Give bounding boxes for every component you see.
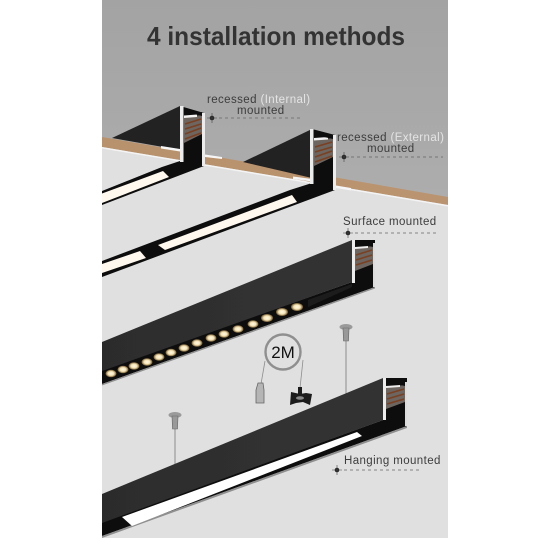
recessed internal lit strip [102, 171, 169, 203]
2M label: 2M [271, 343, 295, 362]
recessed external lit strip: short [102, 251, 146, 273]
hanging lit strip [122, 432, 362, 526]
wood ceiling edge [102, 137, 448, 206]
hanging wire left [174, 428, 176, 466]
label: recessed external: mounted [367, 143, 415, 155]
wall background [102, 0, 448, 538]
ceiling background [102, 0, 448, 198]
label: hanging mounted [332, 455, 441, 475]
icon: black bracket [290, 387, 312, 405]
label: surface mounted: Surface mounted [343, 216, 437, 228]
recessed external profile end [310, 129, 336, 190]
recessed external light track [102, 129, 351, 277]
hanging wire right [345, 340, 347, 396]
surface mounted light [102, 240, 375, 386]
hanging profile end [383, 378, 407, 426]
icon: ceiling anchor left [168, 412, 182, 429]
hanging mounted light [102, 378, 407, 538]
surface profile end [352, 240, 375, 287]
label: recessed external [337, 132, 444, 162]
label: hanging mounted: Hanging mounted [344, 455, 441, 467]
label: recessed internal: mounted [237, 105, 285, 117]
icon: 2M wire coil [261, 334, 303, 388]
recessed internal light track [102, 106, 222, 205]
recessed external lit strip: long [158, 195, 297, 250]
recessed internal profile end [180, 106, 205, 166]
LED spots [106, 303, 303, 377]
label: recessed external: recessed (External) [337, 132, 444, 144]
dark reflector segment [308, 284, 352, 307]
label: recessed internal [207, 94, 310, 123]
icon: ceiling anchor right [340, 324, 352, 341]
icon: wire gripper [256, 383, 264, 403]
label: surface mounted [343, 216, 437, 238]
title: 4 installation methods [147, 21, 405, 51]
label: recessed internal: recessed (Internal) [207, 94, 310, 106]
